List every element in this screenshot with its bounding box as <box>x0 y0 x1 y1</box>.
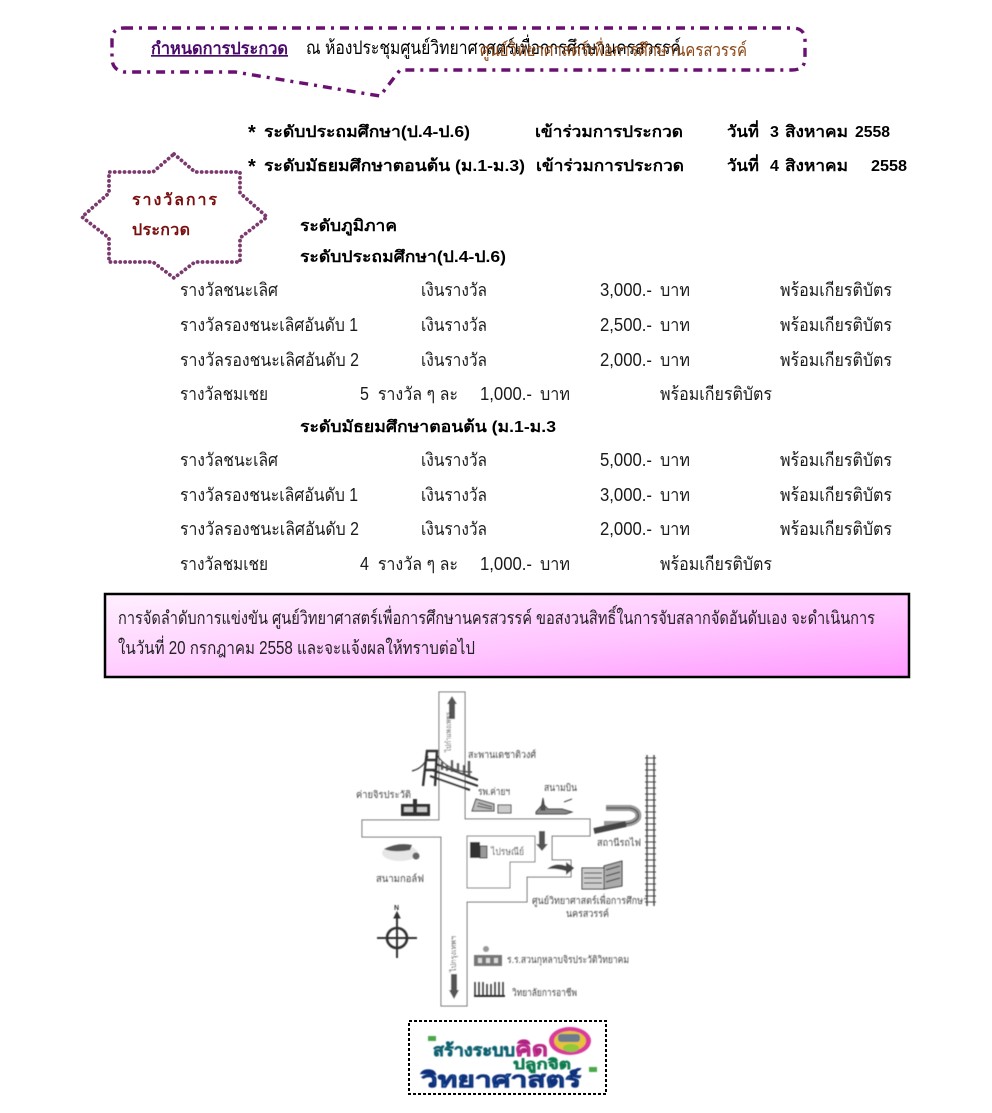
contest dates: สิงหาคม <box>785 123 848 141</box>
prize list: lower secondary: 3,000.- <box>600 485 652 505</box>
icon: college <box>474 982 505 996</box>
prize list: primary: พร้อมเกียรติบัตร <box>780 350 892 370</box>
prize list: lower secondary: รางวัลรองชนะเลิศอันดับ 1 <box>180 485 358 505</box>
contest dates: 4 <box>770 158 779 175</box>
contest dates: วันที่ <box>727 120 759 141</box>
prize list: primary: รางวัลรองชนะเลิศอันดับ 1 <box>180 315 358 335</box>
prize list: lower secondary: บาท <box>660 450 690 470</box>
icon: bridge <box>412 751 478 790</box>
arrow head <box>536 844 548 851</box>
prize list: lower secondary: พร้อมเกียรติบัตร <box>780 450 892 470</box>
prize list: lower secondary <box>180 450 892 574</box>
icon: post office building <box>470 842 487 858</box>
prize list: primary: บาท <box>540 384 570 404</box>
icon: train <box>594 808 638 831</box>
prize list: primary: 3,000.- <box>600 280 652 300</box>
label: golf course: สนามกอล์ฟ <box>376 873 424 885</box>
prize list: lower secondary: 2,000.- <box>600 519 652 539</box>
callout: contest venue <box>112 28 805 96</box>
prize list: lower secondary: บาท <box>540 554 570 574</box>
road label north: ไปกำแพงเพชร <box>444 711 453 753</box>
heading: primary level: ระดับประถมศึกษา(ป.4-ป.6) <box>300 248 506 266</box>
prize list: lower secondary: เงินรางวัล <box>421 519 487 539</box>
slogan word: คิด <box>515 1039 548 1061</box>
heading: regional level: ระดับภูมิภาค <box>300 217 397 237</box>
prize list: primary: บาท <box>660 280 690 300</box>
label: bridge: สะพานเดชาติวงศ์ <box>468 749 537 761</box>
prize list: primary: เงินรางวัล <box>421 280 487 300</box>
contest dates: * <box>248 122 256 144</box>
prize list: lower secondary: 5,000.- <box>600 450 652 470</box>
prize list: lower secondary: พร้อมเกียรติบัตร <box>780 519 892 539</box>
prize list: primary: บาท <box>660 350 690 370</box>
contest dates: เข้าร่วมการประกวด <box>535 123 683 141</box>
prize list: lower secondary: พร้อมเกียรติบัตร <box>780 485 892 505</box>
label: post office: ไปรษณีย์ <box>490 846 524 858</box>
icon: hospital <box>472 799 511 813</box>
logo: science slogan <box>409 1021 606 1094</box>
heading: lower secondary level: ระดับมัธยมศึกษาตอนต้น (ม.1-ม.3 <box>300 418 556 436</box>
panel: draw notice <box>105 594 909 677</box>
prize list: primary: รางวัลชนะเลิศ <box>180 280 279 300</box>
arrow: north road <box>447 696 457 719</box>
road label south: ไปกรุงเทพฯ <box>449 936 458 973</box>
prize list: primary: เงินรางวัล <box>421 350 487 370</box>
contest dates: ระดับมัธยมศึกษาตอนต้น (ม.1-ม.3) <box>264 157 525 175</box>
prize list: primary: รางวัลชมเชย <box>180 384 268 404</box>
logo artwork <box>419 1027 597 1092</box>
icon: compass <box>377 905 417 958</box>
overlapping venue text: ศูนย์วิทยาศาสตร์เพื่อการศึกษานครสวรรค์ <box>480 37 747 61</box>
icon: mascot <box>549 1027 591 1055</box>
prize list: lower secondary: 1,000.- <box>480 554 532 574</box>
slogan line 1: สร้างระบบ <box>433 1041 515 1060</box>
label: hospital: รพ.ค่ายฯ <box>478 787 510 798</box>
contest dates: 2558 <box>855 124 890 141</box>
contest dates: 3 <box>770 124 779 141</box>
contest dates: วันที่ <box>727 154 759 175</box>
badge: prizes star <box>82 154 267 278</box>
contest dates <box>248 120 907 178</box>
map block <box>467 836 535 888</box>
prize list: lower secondary: พร้อมเกียรติบัตร <box>660 554 772 574</box>
prize list: primary: รางวัลรองชนะเลิศอันดับ 2 <box>180 350 359 370</box>
label: college: วิทยาลัยการอาชีพ <box>512 987 577 999</box>
slogan line 2: ปลูกจิต <box>513 1056 571 1073</box>
badge: prizes star: ประกวด <box>132 222 190 239</box>
prize list: primary: 1,000.- <box>480 384 532 404</box>
prize list: lower secondary: รางวัลชนะเลิศ <box>180 450 279 470</box>
prize list: primary: พร้อมเกียรติบัตร <box>780 315 892 335</box>
icon: railway tracks <box>645 755 656 906</box>
prize list: primary: บาท <box>660 315 690 335</box>
arrow: south road <box>449 974 459 999</box>
prize list: primary: พร้อมเกียรติบัตร <box>780 280 892 300</box>
arrow: to science centre <box>547 862 574 875</box>
contest dates: ระดับประถมศึกษา(ป.4-ป.6) <box>264 123 470 141</box>
prize list: primary: พร้อมเกียรติบัตร <box>660 384 772 404</box>
label: science centre: ศูนย์วิทยาศาสตร์เพื่อการศึกษา <box>532 893 648 907</box>
label: station: สถานีรถไฟ <box>597 837 641 849</box>
contest dates: 2558 <box>871 158 907 175</box>
label: school: ร.ร.สวนกุหลาบจิรประวัติวิทยาคม <box>507 955 629 966</box>
contest dates: * <box>248 156 256 178</box>
prize list: lower secondary: บาท <box>660 519 690 539</box>
location map: นครสวรรค์ <box>566 908 609 920</box>
map roads <box>362 692 590 1006</box>
prize list: lower secondary: เงินรางวัล <box>421 485 487 505</box>
prize list: primary: 5 รางวัล ๆ ละ <box>360 384 458 404</box>
prize list: lower secondary: รางวัลรองชนะเลิศอันดับ 2 <box>180 519 359 539</box>
prize list: lower secondary: 4 รางวัล ๆ ละ <box>360 554 458 574</box>
icon: golf course <box>382 844 420 861</box>
icon: airport <box>536 798 572 814</box>
prize list: primary: เงินรางวัล <box>421 315 487 335</box>
prize list: lower secondary: เงินรางวัล <box>421 450 487 470</box>
panel: draw notice: ในวันที่ 20 กรกฎาคม 2558 และจะแจ้งผลให้ทราบต่อไป <box>118 635 475 658</box>
arrow: down to centre <box>539 831 545 846</box>
contest dates: สิงหาคม <box>785 157 848 175</box>
icon: camp building <box>401 799 430 816</box>
prize list: primary: 2,000.- <box>600 350 652 370</box>
label: airport: สนามบิน <box>544 783 577 794</box>
venue text: ณ ห้องประชุมศูนย์วิทยาศาสตร์เพื่อการศึกษานครสวรรค์ <box>306 34 681 60</box>
location map <box>356 692 656 1006</box>
icon: green tabs <box>428 1036 597 1072</box>
label: camp: ค่ายจิรประวัติ <box>356 790 411 801</box>
contest dates: เข้าร่วมการประกวด <box>536 157 684 175</box>
prize list: primary <box>180 280 892 404</box>
icon: school <box>474 946 502 966</box>
badge label: รางวัลการ <box>132 191 217 209</box>
prize list: lower secondary: บาท <box>660 485 690 505</box>
callout heading: กำหนดการประกวด <box>151 39 288 58</box>
label: north: N <box>394 905 399 912</box>
prize list: lower secondary: รางวัลชมเชย <box>180 554 268 574</box>
prize list: primary: 2,500.- <box>600 315 652 335</box>
slogan line 3: วิทยาศาสตร์ <box>419 1068 582 1092</box>
icon: science centre <box>582 861 622 889</box>
